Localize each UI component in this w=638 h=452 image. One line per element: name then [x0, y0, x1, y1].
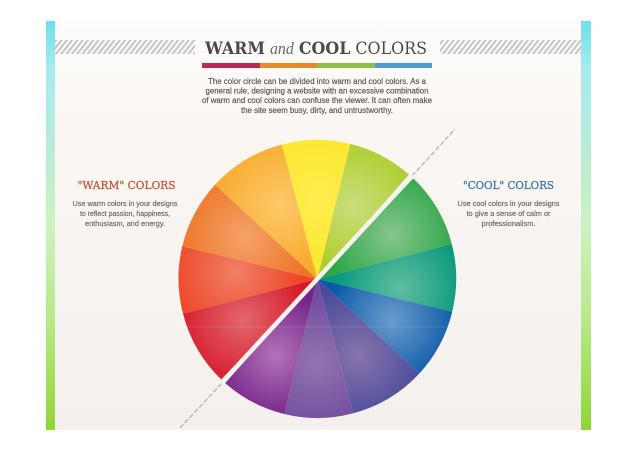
wedge: indigo [317, 279, 419, 413]
background panel [46, 21, 591, 430]
cool description: to give a sense of calm or [466, 211, 551, 218]
diagonal white divider [221, 175, 413, 384]
cool description: professionalism. [482, 221, 536, 228]
cool description: Use cool colors in your designs [458, 201, 560, 208]
intro text: The color circle can be divided into warm and cool colors. As a [208, 77, 427, 86]
cool description [458, 201, 560, 228]
dashed divider lower [180, 382, 223, 428]
wedge: teal [317, 244, 456, 312]
wedge: blue [317, 279, 452, 373]
intro text: the site seem busy, dirty, and untrustworthy. [241, 106, 393, 115]
wedge: yellow [282, 140, 350, 279]
warm description: enthusiasm, and energy. [85, 221, 165, 228]
wedge: violet [225, 279, 317, 414]
right hatch band [440, 40, 581, 54]
intro text: of warm and cool colors can confuse the viewer. It can often make [202, 96, 432, 105]
left gradient stripe [46, 21, 55, 430]
intro text: general rule, designing a website with an excessive combination [206, 86, 428, 96]
wedge: amber [215, 145, 317, 279]
wedge: red [183, 279, 317, 380]
cool heading: "COOL" COLORS [463, 178, 554, 192]
warm description: Use warm colors in your designs [72, 201, 178, 208]
colour wheel [179, 140, 456, 418]
intro text [202, 77, 432, 115]
wedge: green [317, 178, 452, 279]
warm heading: "WARM" COLORS [78, 178, 176, 192]
wedge: purple [284, 279, 353, 418]
title: WARM and COOL COLORS [204, 39, 427, 58]
wedge: red-orange [179, 246, 317, 314]
wedge: yellow-green [317, 144, 409, 279]
right gradient stripe [581, 21, 591, 430]
warm description [72, 201, 178, 228]
wedge: orange [182, 185, 317, 279]
dashed divider upper [412, 129, 455, 176]
title colour bar [202, 63, 432, 68]
warm description: to reflect passion, happiness, [80, 211, 170, 218]
left hatch band [55, 40, 195, 54]
